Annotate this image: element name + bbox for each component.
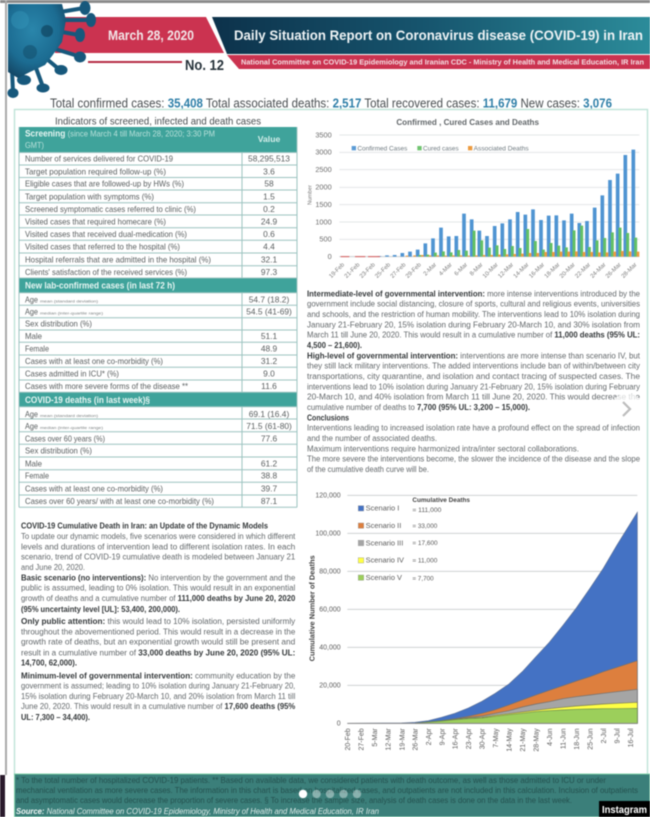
screening rows: Target population with symptoms (%) [25, 191, 154, 201]
screening rows: 97.3 [261, 267, 277, 277]
legend: = 11,000 [412, 558, 438, 565]
new case rows: 54.5 (41-69) [246, 307, 292, 317]
text block: dynamic models: government is assumed; leading to 10% isolation during January 21-February 20, [21, 681, 295, 691]
text block: dynamic models: 15% isolation during February 20-March 10, and 20% isolation from March 11 till [21, 691, 295, 701]
y axis labels: 100,000 [315, 531, 341, 538]
death rows: Cases over 60 years (%) [25, 433, 105, 443]
text block: interventions and conclusions: 20-March 10, and 40% isolation from March 11 till June 20, 2020. This would decrease the [307, 392, 640, 402]
death rows: 77.6 [261, 433, 277, 443]
legend: = 111,000 [412, 507, 442, 514]
new case rows: 9.0 [263, 369, 275, 379]
y axis labels: 2500 [315, 165, 332, 174]
screening rows [25, 154, 290, 277]
new case rows [25, 294, 292, 391]
x axis labels: 20-Feb [345, 728, 352, 750]
new case rows: Cases with at least one co-morbidity (%) [25, 356, 163, 366]
date ribbon [55, 17, 224, 53]
x axis labels [328, 262, 638, 280]
death rows: 87.1 [261, 496, 277, 506]
x axis labels: 30-Apr [480, 728, 487, 749]
new case rows: 54.7 (18.2) [249, 294, 289, 304]
screening rows: 0.6 [263, 229, 275, 239]
x axis labels: 26-Mar [413, 728, 420, 750]
legend: = 33,000 [412, 523, 438, 530]
committee subtitle strip: National Committee on COVID-19 Epidemiology and Iranian CDC - Ministry of Health and Medical Education, IR Iran [241, 60, 644, 66]
bar chart: confirmed, cured, deaths [307, 118, 639, 280]
text block: dynamic models: To update our dynamic models, five scenarios were considered in which different [21, 531, 296, 541]
text block: dynamic models: COVID-19 Cumulative Death in Iran: an Update of the Dynamic Models [21, 520, 268, 530]
x axis labels: 9-Apr [439, 728, 446, 745]
x axis labels: 7-May [493, 728, 500, 748]
legend [358, 497, 470, 582]
legend: Scenario V [366, 573, 402, 582]
carousel dots [299, 790, 361, 798]
x axis labels: 4-Mar [438, 262, 454, 277]
footnotes [16, 775, 638, 805]
y axis labels: 120,000 [315, 493, 341, 500]
footnotes: * To the total number of hospitalized COVID-19 patients. ** Based on available data, we considered patients with death outcome, as well as those admitted to ICU or under [16, 775, 606, 785]
x axis labels: 2-Apr [426, 728, 433, 745]
text block: dynamic models: 14,700, 62,000). [21, 658, 77, 668]
y axis labels: 0 [337, 721, 341, 728]
x axis labels: 20-Mar [559, 262, 577, 280]
screening rows: Visited cases that received dual-medication (%) [25, 229, 187, 239]
legend [352, 145, 529, 152]
legend: Scenario I [366, 504, 399, 513]
area: scenario I [347, 512, 637, 723]
x axis labels: 16-Mar [528, 262, 546, 280]
carousel next arrow [611, 393, 643, 425]
screening rows: Clients' satisfaction of the received services (%) [25, 267, 187, 277]
death rows: Female [25, 471, 49, 481]
report number [88, 57, 224, 74]
x axis labels: 9-Jul [615, 728, 622, 743]
screening rows: Target population required follow-up (%) [25, 166, 166, 176]
x axis labels: 5-Mar [372, 728, 379, 747]
x axis labels: 23-Apr [466, 728, 473, 749]
y axis labels [315, 493, 341, 728]
x axis labels: 11-Jun [561, 728, 568, 749]
y axis labels: 3500 [315, 130, 332, 139]
x axis labels: 26-Mar [605, 262, 623, 280]
y axis labels: 2000 [315, 183, 332, 192]
x axis labels: 21-May [520, 728, 527, 752]
table heading: Indicators of screened, infected and death cases [55, 116, 261, 128]
screening rows: Number of services delivered for COVID-19 [25, 154, 173, 164]
x axis labels: 29-Feb [405, 262, 423, 280]
x axis labels: 28-Mar [621, 262, 638, 280]
death bars [407, 251, 638, 257]
new case rows: Female [25, 344, 49, 354]
header: screening: GMT) [25, 140, 44, 150]
legend: Cumulative Deaths [412, 497, 470, 504]
y axis labels: 0 [328, 252, 332, 261]
x axis labels: 18-Jun [574, 728, 581, 750]
y axis title: Cumulative Number of Deaths [310, 555, 317, 661]
x axis labels: 2-Jul [601, 728, 608, 743]
text block: dynamic models: Minimum-level of governmental intervention: community education by the [21, 670, 296, 680]
content panel border [14, 110, 648, 774]
death rows: 39.7 [261, 483, 277, 493]
text block: dynamic models: and June 20, 2020. [21, 562, 85, 572]
screening rows: Hospital referrals that are admitted in the hospital (%) [25, 254, 211, 264]
area: scenario V [415, 708, 637, 723]
footnotes: and asymptomatic cases would decrease the proportion of severe cases. § To increase the sample size, analysis of death cases is done on the data in the last week. [16, 795, 572, 805]
y axis labels: 60,000 [319, 607, 341, 614]
header: deaths [19, 392, 297, 407]
y axis title: Number [307, 185, 313, 205]
text block: interventions and conclusions: of the cumulative death curve will be. [307, 464, 429, 474]
header: screening: Value [258, 134, 280, 144]
x axis labels: 12-Mar [497, 262, 515, 280]
x axis labels: 19-Feb [328, 262, 347, 280]
x axis labels: 10-Mar [482, 262, 500, 280]
x axis labels: 19-Mar [399, 728, 406, 750]
legend: Confirmed Cases [357, 145, 408, 152]
death rows: mean (standard deviation) [40, 413, 99, 418]
screening rows: Visited cases that required homecare (%) [25, 216, 166, 226]
x axis labels: 8-Mar [469, 262, 484, 277]
confirmed bars [379, 150, 633, 257]
death rows: median (inter-quartile range) [40, 425, 104, 430]
x axis labels [345, 728, 635, 752]
x axis labels: 25-Feb [374, 262, 393, 280]
y axis labels: 3000 [315, 148, 332, 157]
x axis labels: 4-Jun [547, 728, 554, 746]
x axis labels: 23-Feb [359, 262, 377, 280]
text block: dynamic models: public is assumed, leading to 0% isolation. This would result in an exponential [21, 583, 295, 593]
death rows: Age [25, 409, 38, 419]
header: deaths: COVID-19 deaths (in last week)§ [25, 394, 150, 405]
text block: dynamic models: scenario, trend of COVID-19 cumulative death is modeled between January 21 [21, 552, 296, 562]
legend: Scenario IV [366, 556, 404, 565]
x axis labels: 28-May [534, 728, 541, 752]
header banner [55, 17, 650, 74]
y axis labels: 40,000 [319, 645, 341, 652]
x axis labels: 2-Mar [423, 262, 438, 277]
legend: Cured cases [423, 145, 459, 152]
death rows: Sex distribution (%) [25, 446, 92, 456]
screening rows: 24.9 [261, 216, 277, 226]
text block: interventions and conclusions [307, 289, 641, 474]
cured bars [420, 226, 636, 257]
indicators table [19, 127, 297, 507]
source line: Source: National Committee on COVID-19 Epidemiology, Ministry of Health and Medical Education, IR Iran [16, 806, 379, 816]
text block: interventions and conclusions: Maximum interventions require harmonized intra/inter sectoral collaborations. [307, 443, 579, 453]
new case rows: Cases admitted in ICU* (%) [25, 369, 119, 379]
new case rows: Male [25, 331, 42, 341]
death rows: 61.2 [261, 458, 277, 468]
text block: interventions and conclusions: Conclusions [307, 412, 349, 422]
date ribbon: March 28, 2020 [108, 27, 194, 43]
legend: Scenario II [366, 521, 401, 530]
text block: dynamic models: growth of deaths and a cumulative number of 111,000 deaths by June 20, 2020 [21, 593, 295, 603]
text block: dynamic models: result in a cumulative number of 33,000 deaths by June 20, 2020 (95% UL: [21, 647, 295, 657]
text block: dynamic models: June 20, 2020. This would result in a cumulative number of 17,600 deaths (95% [21, 701, 296, 711]
screening rows: 0.2 [263, 204, 275, 214]
screening rows: 1.5 [263, 191, 275, 201]
screening rows: 32.1 [261, 254, 277, 264]
text block: dynamic models: growth rate of deaths, but an exponential growth would still be present and [21, 637, 296, 647]
x axis labels: 16-Jul [628, 728, 635, 747]
header: new lab-confirmed cases: New lab-confirmed cases (in last 72 h) [25, 280, 175, 290]
area chart: cumulative deaths by scenario [310, 493, 637, 752]
legend: Scenario III [366, 538, 403, 547]
text block: dynamic models: Basic scenario (no interventions): No intervention by the government and the [21, 572, 295, 582]
committee subtitle strip [227, 55, 650, 69]
text block: interventions and conclusions: and the number of associated deaths. [307, 433, 437, 443]
death rows: Male [25, 458, 42, 468]
text block: dynamic models: throughout the abovementioned period. This would result in a decrease in the [21, 626, 295, 636]
new case rows: Sex distribution (%) [25, 319, 92, 329]
death rows: Cases over 60 years/ with at least one co-morbidity (%) [25, 496, 214, 506]
new case rows: 31.2 [261, 356, 277, 366]
death rows [25, 409, 292, 506]
header: screening [19, 127, 297, 152]
death rows: Age [25, 421, 38, 431]
screening rows: Visited cases that referred to the hospital (%) [25, 242, 180, 252]
legend: = 17,600 [412, 540, 438, 547]
y axis labels: 80,000 [319, 569, 341, 576]
death rows: 69.1 (16.4) [249, 409, 289, 419]
x axis labels: 21-Feb [344, 262, 362, 280]
x axis labels: 27-Feb [359, 728, 366, 750]
footnote band [14, 774, 650, 817]
screening rows: Screened symptomatic cases referred to clinic (%) [25, 204, 196, 214]
x axis labels: 18-Mar [544, 262, 561, 280]
area: scenario III [415, 689, 637, 723]
x axis labels: 27-Feb [390, 262, 408, 280]
area: scenario IV [415, 702, 637, 723]
legend: Associated Deaths [474, 145, 529, 152]
x axis labels: 16-Apr [453, 728, 460, 749]
text block: dynamic models: levels and durations of intervention lead to different isolation rates. In each [21, 541, 296, 551]
death rows: Cases with at least one co-morbidity (%) [25, 483, 163, 493]
header: new lab-confirmed cases [19, 278, 297, 292]
text block: interventions and conclusions: 4,500 – 21,600). [307, 340, 362, 350]
new case rows: 51.1 [261, 331, 277, 341]
new case rows: mean (standard deviation) [40, 298, 99, 303]
report number: No. 12 [185, 57, 224, 74]
header: screening: Screening (since March 4 till March 28, 2020; 3:30 PM [25, 128, 215, 138]
text block: dynamic models: Only public attention: this would lead to 10% isolation, persisted uniformly [21, 616, 296, 626]
text block: dynamic models: (95% uncertainty level [UL]: 53,400, 200,000). [21, 604, 180, 614]
text block: interventions and conclusions: High-level of governmental intervention: interventions are more intense than scenario IV, but [307, 350, 641, 360]
new case rows: Cases with more severe forms of the disease ** [25, 381, 189, 391]
x axis labels: 25-Jun [588, 728, 595, 750]
y axis labels [315, 130, 332, 261]
x axis labels: 14-May [507, 728, 514, 752]
screening rows: 3.6 [263, 166, 275, 176]
new case rows: 11.6 [261, 381, 277, 391]
death rows: 71.5 (61-80) [246, 421, 292, 431]
new case rows: Age [25, 307, 38, 317]
text block: interventions and conclusions: cumulative number of deaths to 7,700 (95% UL: 3,200 – 15,000). [307, 402, 530, 412]
text block: dynamic models [21, 520, 296, 722]
text block: interventions and conclusions: transportations, city quarantine, and isolation and contact tracing of suspected cases. The [307, 371, 640, 381]
x axis labels: 12-Mar [386, 728, 393, 750]
headline totals: Total confirmed cases: 35,408 Total associated deaths: 2,517 Total recovered cases: 11,679 New cases: 3,076 [50, 96, 612, 110]
x axis labels: 14-Mar [513, 262, 530, 280]
screening rows: 4.4 [263, 242, 275, 252]
new case rows: Age [25, 294, 38, 304]
screening rows: 58,295,513 [248, 154, 290, 164]
y axis labels: 1500 [315, 200, 332, 209]
new case rows: median (inter-quartile range) [40, 311, 104, 316]
legend: = 7,700 [412, 575, 434, 582]
chart title: Confirmed , Cured Cases and Deaths [396, 118, 540, 127]
y axis labels: 20,000 [319, 683, 341, 690]
x axis labels: 22-Mar [574, 262, 592, 280]
area: scenario II [415, 661, 637, 723]
text block: interventions and conclusions: March 11 till June 20, 2020. This would result in a cumulative number of 11,000 deaths (95% UL: [307, 330, 640, 340]
icon: coronavirus [8, 3, 94, 96]
screening rows: Eligible cases that are followed-up by HWs (%) [25, 179, 184, 189]
x axis labels: 6-Mar [454, 262, 469, 277]
text block: interventions and conclusions: January 21-February 20, 15% isolation during February 20-March 10, and 30% isolation from [307, 319, 640, 329]
text block: dynamic models: UL: 7,300 – 34,400). [21, 712, 90, 722]
y axis labels: 1000 [315, 217, 332, 226]
x axis labels: 24-Mar [590, 262, 607, 280]
death rows: 38.8 [261, 471, 277, 481]
new case rows: 48.9 [261, 344, 277, 354]
report title band [212, 17, 650, 54]
screening rows: 58 [264, 179, 274, 189]
y axis labels: 500 [319, 235, 332, 244]
text block: interventions and conclusions: Intermediate-level of governmental intervention: more intense interventions introduced by the [307, 289, 640, 299]
